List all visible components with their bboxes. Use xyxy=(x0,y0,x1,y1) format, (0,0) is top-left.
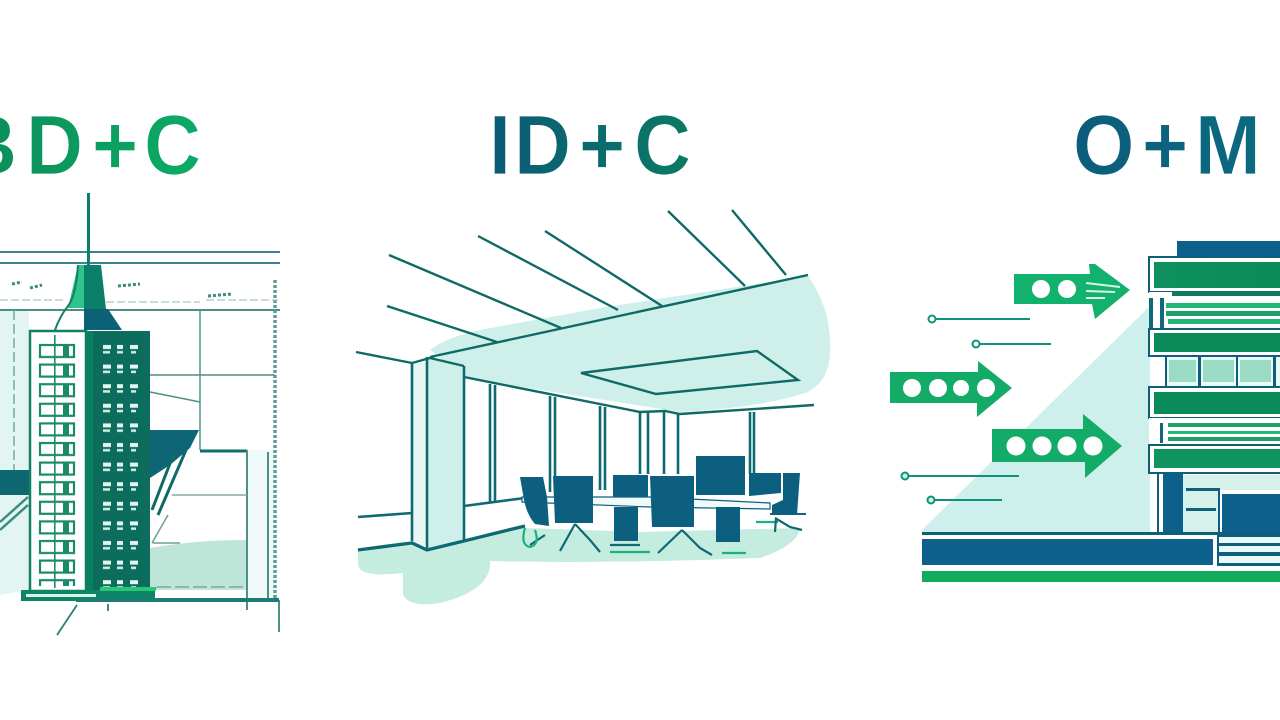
column xyxy=(412,357,464,549)
ceiling and beam lines xyxy=(356,210,814,414)
heading: ID+C: ID+C xyxy=(489,99,691,193)
dark wedge and stair xyxy=(0,430,199,530)
floor band 2 xyxy=(1149,329,1280,356)
plinth xyxy=(922,532,1280,582)
slats 1 xyxy=(1149,291,1280,329)
tower: dark face xyxy=(85,331,150,591)
mint background wedge xyxy=(922,306,1150,535)
blueprint frame lines xyxy=(0,252,280,635)
tower: light face xyxy=(30,331,86,591)
mint floor xyxy=(358,528,800,604)
tower base xyxy=(21,587,279,602)
floor band 3 xyxy=(1149,387,1280,418)
illustration: blueprint skyscraper (BD+C) xyxy=(0,193,280,635)
floor band 4 xyxy=(1149,445,1280,473)
antenna and spire xyxy=(55,193,122,330)
illustration: office interior (ID+C) xyxy=(356,210,830,604)
mint ceiling xyxy=(430,276,830,412)
arrow: lower xyxy=(992,414,1122,478)
illustration: building with arrows (O+M) xyxy=(890,241,1280,582)
arrow: middle xyxy=(890,361,1012,417)
building xyxy=(1149,241,1280,534)
blueprint background fills xyxy=(0,310,277,600)
chairs and monitor xyxy=(520,456,800,527)
ground floor xyxy=(1157,474,1280,534)
arrow: top xyxy=(1014,264,1130,319)
chair legs xyxy=(523,518,802,555)
floor band 1 xyxy=(1149,257,1280,292)
heading: O+M: O+M xyxy=(1073,99,1261,193)
window row xyxy=(1165,356,1280,388)
conference table xyxy=(522,497,770,509)
column and window mullion lines xyxy=(358,357,806,550)
table pedestals xyxy=(614,507,740,542)
roof xyxy=(1177,241,1280,257)
speed lines xyxy=(902,316,1051,504)
slats 2 xyxy=(1149,418,1280,444)
